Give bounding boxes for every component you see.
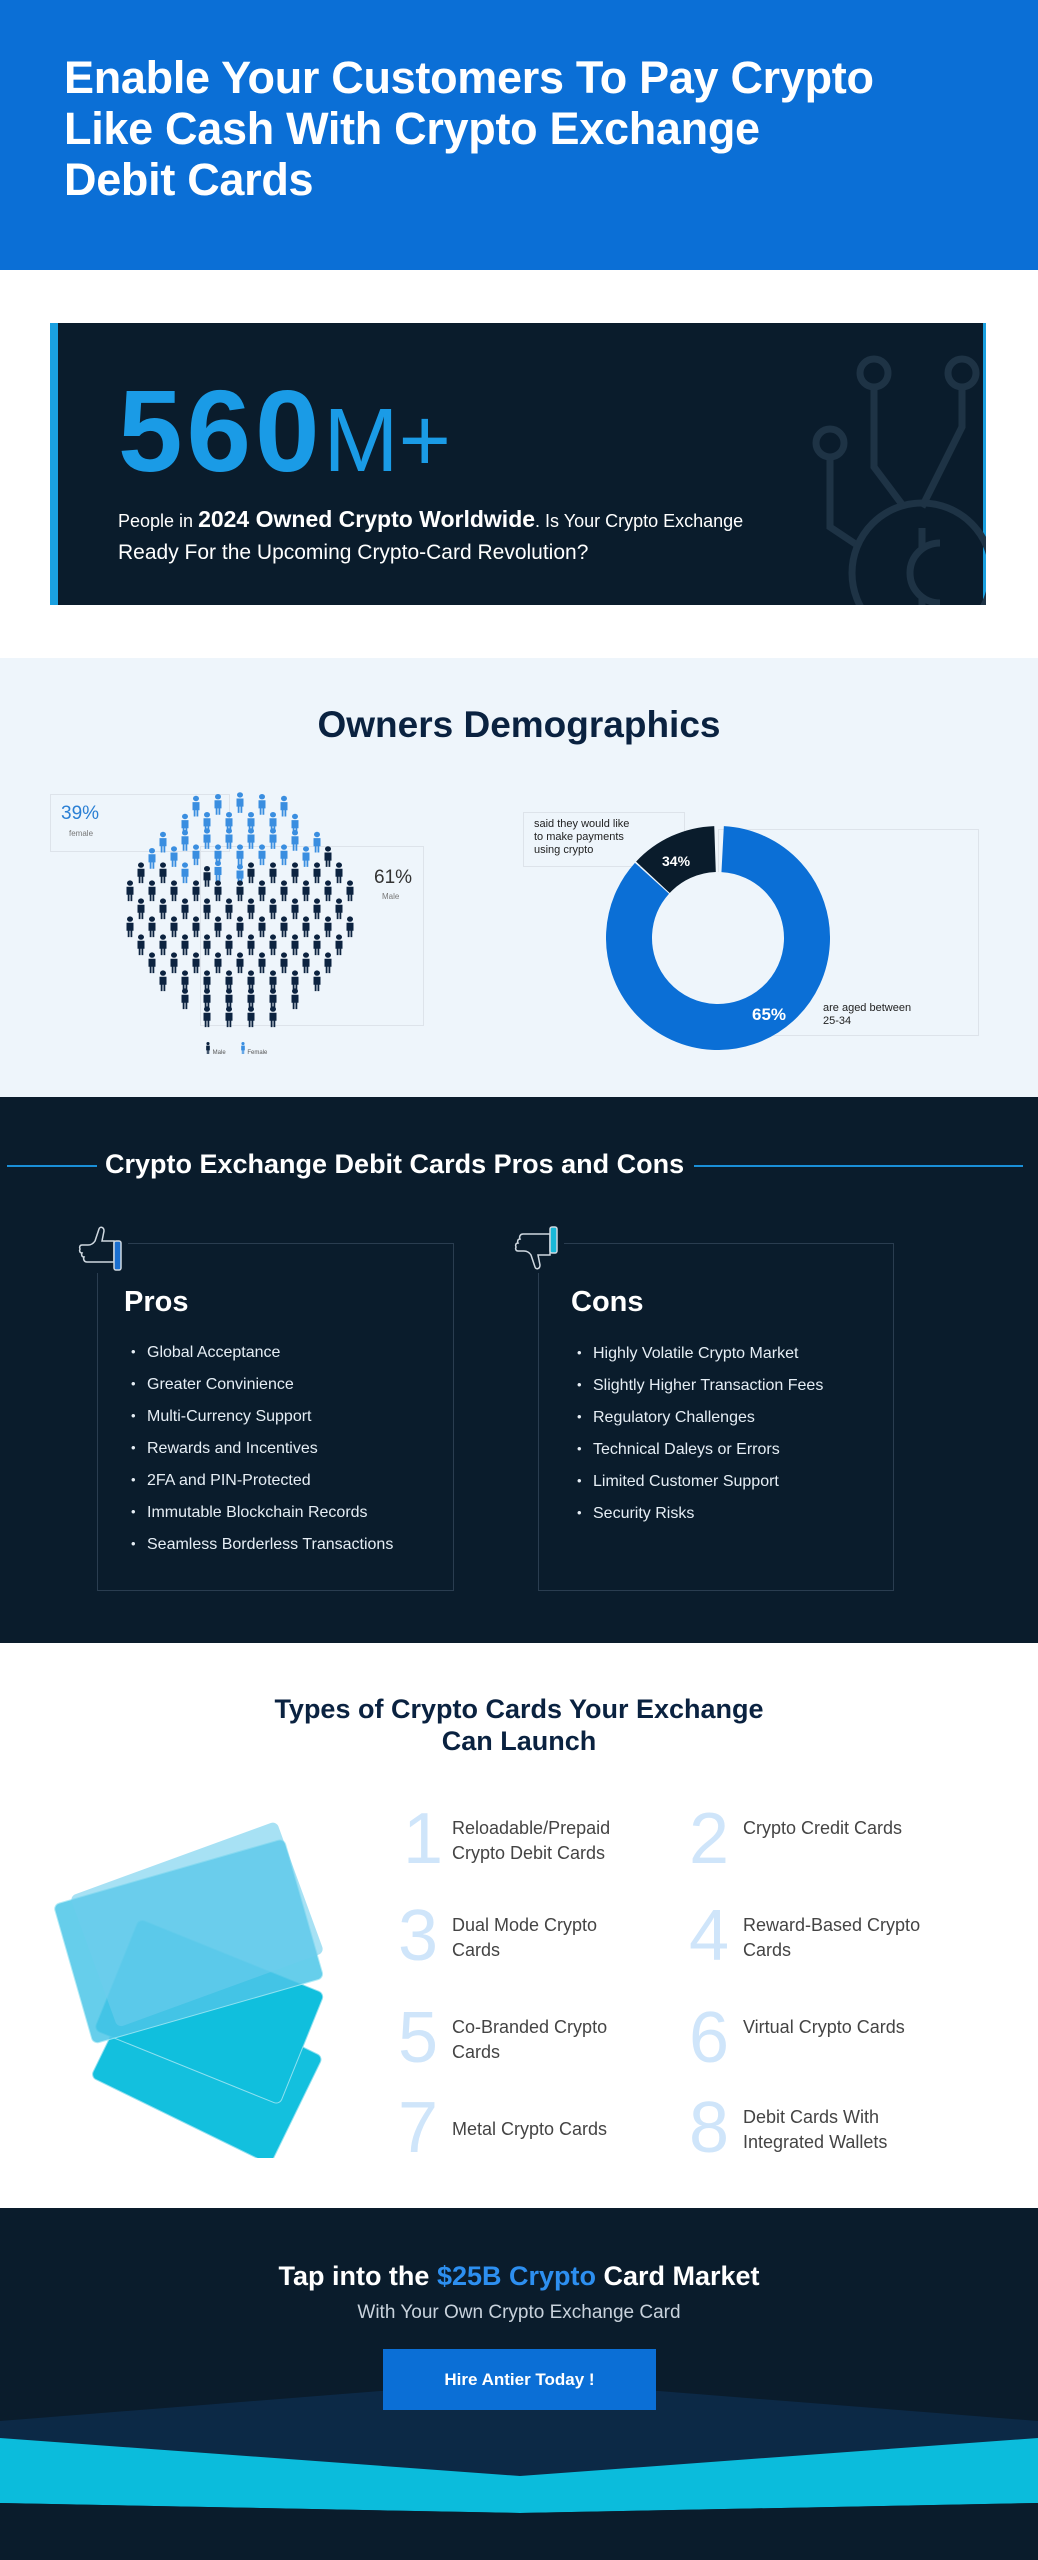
heading: Types of Crypto Cards Your Exchange <box>274 1694 764 1724</box>
item 8 <box>689 2088 887 2168</box>
item 1: 1 <box>403 1799 443 1879</box>
button <box>383 2349 656 2410</box>
donut chart: 65% <box>752 1005 786 1024</box>
item 2: 2 <box>689 1799 729 1879</box>
title: Debit Cards <box>64 154 313 205</box>
callout: payments <box>523 812 685 867</box>
item 3 <box>398 1896 597 1976</box>
big number: 560M+ <box>118 366 451 496</box>
list: pros: Global Acceptance <box>147 1344 280 1361</box>
icon: circuit coin <box>812 356 986 605</box>
list: card types <box>398 1799 920 2168</box>
callout: female: 39% <box>61 803 99 824</box>
list: cons: Technical Daleys or Errors <box>593 1441 780 1458</box>
CTA heading: Tap into the $25B Crypto Card Market <box>278 2261 760 2291</box>
item 4 <box>689 1896 920 1976</box>
button: Hire Antier Today ! <box>444 2370 595 2389</box>
callout: male: 61% <box>374 867 412 888</box>
callout: female: female <box>69 829 93 838</box>
list: cons: Regulatory Challenges <box>593 1409 755 1426</box>
chart: people cluster <box>126 792 354 1028</box>
item 4: Cards <box>743 1940 791 1960</box>
title: Enable Your Customers To Pay Crypto <box>64 52 874 103</box>
panel: 560M stat <box>50 323 986 605</box>
item 5: 5 <box>398 1998 438 2078</box>
item 7 <box>398 2088 607 2168</box>
item 1: Reloadable/Prepaid <box>452 1818 610 1838</box>
item 8: 8 <box>689 2088 729 2168</box>
item 6: 6 <box>689 1998 729 2078</box>
heading <box>274 1694 764 1756</box>
heading: Owners Demographics <box>317 704 720 745</box>
stat text: Ready For the Upcoming Crypto-Card Revolution? <box>118 541 588 564</box>
legend: Female <box>247 1050 267 1056</box>
item 3: Cards <box>452 1940 500 1960</box>
item 5: Cards <box>452 2042 500 2062</box>
list: pros: Seamless Borderless Transactions <box>147 1536 393 1553</box>
item 4: 4 <box>689 1896 729 1976</box>
callout: payments: using crypto <box>534 844 593 856</box>
list: pros <box>132 1344 393 1553</box>
item 5 <box>398 1998 607 2078</box>
title <box>64 52 874 205</box>
donut chart <box>606 826 830 1050</box>
item 6 <box>689 1998 905 2078</box>
section: card types <box>0 1643 1038 2208</box>
item 8: Integrated Wallets <box>743 2132 887 2152</box>
item 8: Debit Cards With <box>743 2107 879 2127</box>
item 7: Metal Crypto Cards <box>452 2119 607 2139</box>
panel: pros and cons <box>0 1097 1038 1643</box>
stat text: People in 2024 Owned Crypto Worldwide. Is Your Crypto Exchange <box>118 506 743 532</box>
list: cons: Highly Volatile Crypto Market <box>593 1345 798 1362</box>
item 7: 7 <box>398 2088 438 2168</box>
panel: cons <box>538 1243 894 1591</box>
item 1: Crypto Debit Cards <box>452 1843 605 1863</box>
legend: Male <box>213 1050 226 1056</box>
heading: Can Launch <box>442 1726 596 1756</box>
callout: payments: said they would like <box>534 818 629 830</box>
section: call to action <box>0 2208 1038 2560</box>
list: pros: Greater Convinience <box>147 1376 294 1393</box>
heading: Cons: Cons <box>571 1286 644 1318</box>
callout: age: 25-34 <box>823 1015 851 1027</box>
callout: payments: to make payments <box>534 831 624 843</box>
list: cons <box>578 1345 823 1522</box>
image: stacked cards <box>54 1822 324 2158</box>
background chevrons <box>0 2390 1038 2513</box>
stat text <box>118 506 743 564</box>
heading: Pros: Pros <box>124 1286 188 1318</box>
callout: age <box>718 829 979 1036</box>
list: cons: Security Risks <box>593 1505 694 1522</box>
item 5: Co-Branded Crypto <box>452 2017 607 2037</box>
donut chart: 34% <box>662 853 691 869</box>
title: Like Cash With Crypto Exchange <box>64 103 760 154</box>
list: cons: Limited Customer Support <box>593 1473 779 1490</box>
panel: demographics <box>0 658 1038 1097</box>
callout: male: Male <box>382 892 399 901</box>
list: pros: Rewards and Incentives <box>147 1440 318 1457</box>
legend <box>206 1042 268 1056</box>
callout: age: are aged between <box>823 1002 911 1014</box>
header <box>0 0 1038 270</box>
panel: pros <box>97 1243 454 1591</box>
item 3: 3 <box>398 1896 438 1976</box>
heading with lines: Crypto Exchange Debit Cards Pros and Cons <box>105 1149 684 1179</box>
list: cons: Slightly Higher Transaction Fees <box>593 1377 823 1394</box>
icon: thumbs down <box>514 1225 564 1273</box>
item 2: Crypto Credit Cards <box>743 1818 902 1838</box>
item 4: Reward-Based Crypto <box>743 1915 920 1935</box>
item 6: Virtual Crypto Cards <box>743 2017 905 2037</box>
list: pros: Immutable Blockchain Records <box>147 1504 368 1521</box>
callout: female <box>50 794 230 852</box>
list: pros: Multi-Currency Support <box>147 1408 312 1425</box>
CTA subtitle: With Your Own Crypto Exchange Card <box>357 2302 681 2323</box>
item 2 <box>689 1799 902 1879</box>
item 3: Dual Mode Crypto <box>452 1915 597 1935</box>
item 1 <box>403 1799 610 1879</box>
icon: thumbs up <box>78 1225 128 1273</box>
callout: male <box>200 846 424 1026</box>
list: pros: 2FA and PIN-Protected <box>147 1472 311 1489</box>
